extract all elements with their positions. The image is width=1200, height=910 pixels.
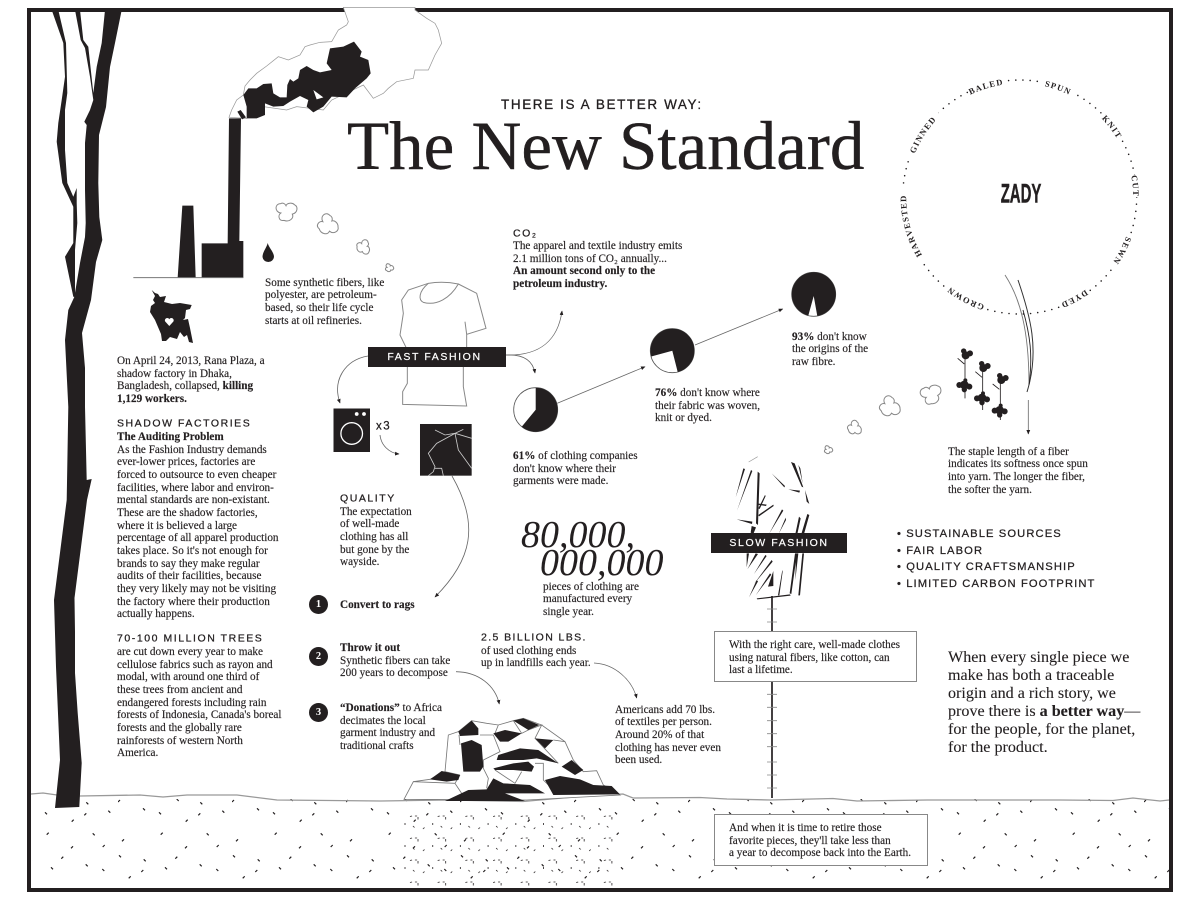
text: auditing problem: ever-lower prices, factories are	[117, 456, 255, 468]
text: Rana Plaza	[117, 355, 265, 405]
icon: oil drop	[262, 243, 274, 262]
title eyebrow: THERE IS A BETTER WAY:	[501, 97, 703, 112]
text: Rana Plaza: shadow factory in Dhaka,	[117, 368, 232, 380]
text: quality: wayside.	[340, 556, 379, 568]
text: auditing problem: These are the shadow factories,	[117, 507, 258, 519]
fibre process ring	[903, 80, 1137, 314]
label: fast fashion	[368, 347, 506, 367]
heading: shadow factories: SHADOW FACTORIES	[117, 418, 251, 430]
arrow: fast fashion to washing	[338, 356, 368, 403]
text: decompose: a year to decompose back into the Earth.	[729, 847, 911, 859]
text: auditing problem: forced to outsource to even cheaper	[117, 469, 276, 481]
text: lifetime: using natural fibers, like cotton, can	[729, 652, 890, 664]
text: quality: clothing has all	[340, 531, 408, 543]
pole	[767, 596, 777, 798]
text: pieces of clothing: single year.	[543, 606, 594, 618]
panel: landfill	[481, 632, 591, 669]
text: synthetic fibers: starts at oil refineries.	[265, 315, 362, 327]
text: CO2	[513, 240, 682, 290]
text: CO2: petroleum industry.	[513, 278, 607, 290]
arrow: landfill text to heap	[456, 672, 499, 704]
heading: landfill: 2.5 BILLION LBS.	[481, 632, 587, 644]
text: landfill: up in landfills each year.	[481, 657, 591, 669]
text: lifetime: With the right care, well-made clothes	[729, 639, 900, 651]
panel: CO2	[513, 228, 682, 290]
ground line	[31, 793, 1169, 802]
pie: 93%	[792, 272, 836, 316]
ZADY logo: ZADY	[1001, 178, 1041, 208]
text: step 2: 200 years to decompose	[340, 667, 448, 679]
closing statement: origin and a rich story, we	[948, 685, 1116, 702]
text: lifetime: last a lifetime.	[729, 664, 793, 676]
list: new standard criteria: • QUALITY CRAFTSMANSHIP	[897, 561, 1076, 573]
slow fashion dress	[736, 457, 809, 599]
big number: 000,000	[540, 542, 664, 584]
text: 93%: 93% don't know	[792, 330, 867, 342]
ring labels: DYED	[1062, 290, 1088, 307]
text: lifetime	[728, 639, 900, 676]
text: Americans: Americans add 70 lbs.	[615, 704, 715, 716]
number 3	[309, 703, 328, 722]
text: million trees: cellulose fabrics such as rayon and	[117, 659, 273, 671]
text: auditing problem: the factory where their production	[117, 596, 270, 608]
text: 76%: 76% don't know where	[655, 387, 760, 399]
text: million trees: America.	[117, 747, 158, 759]
panel: quality	[340, 492, 412, 568]
text: step 2: Throw it out	[340, 642, 400, 654]
text: staple length: into yarn. The longer the fiber,	[948, 471, 1085, 483]
closing statement: for the people, for the planet,	[948, 721, 1135, 738]
text: auditing problem: actually happens.	[117, 608, 195, 620]
closing statement: for the product.	[948, 739, 1048, 756]
text: 61%: 61% of clothing companies	[513, 450, 638, 462]
ring labels: GROWN	[947, 288, 984, 310]
text: auditing problem: The Auditing Problem	[117, 431, 224, 443]
text: synthetic fibers: polyester, are petroleum-	[265, 289, 377, 301]
fibre strands	[1005, 275, 1033, 392]
text: 93%: the origins of the	[792, 343, 868, 355]
text: CO2: An amount second only to the	[513, 265, 655, 277]
text: auditing problem: where it is believed a large	[117, 520, 237, 532]
text: staple length: the softer the yarn.	[948, 484, 1032, 496]
number 2: 2	[316, 651, 321, 662]
heading: million trees: 70-100 MILLION TREES	[117, 632, 263, 644]
number 1	[309, 595, 328, 614]
text: auditing problem: percentage of all apparel production	[117, 532, 279, 544]
text: million trees: forests and the globally rare	[117, 722, 242, 734]
text: step 2	[340, 642, 450, 679]
text: million trees: endangered forests including rain	[117, 697, 266, 709]
heading: quality: QUALITY	[340, 492, 396, 504]
text: CO2: 2.1 million tons of CO₂ annually...	[513, 253, 667, 265]
number 1: 1	[316, 599, 321, 610]
ring labels: HARVESTED	[900, 196, 922, 258]
text: Americans: been used.	[615, 754, 662, 766]
text: 93%	[792, 330, 868, 368]
arrow: 61% to 76%	[557, 367, 645, 403]
text: auditing problem	[116, 431, 279, 620]
ring labels: CUT	[1132, 176, 1139, 196]
text: pieces of clothing: manufactured every	[543, 593, 632, 605]
text: landfill: of used clothing ends	[481, 644, 576, 656]
ring labels: SPUN	[1045, 81, 1071, 94]
text: auditing problem: facilities, where labor and environ-	[117, 482, 274, 494]
text: 76%: their fabric was woven,	[655, 400, 760, 412]
text: 93%: raw fibre.	[792, 356, 835, 368]
arrow: 76% to 93%	[695, 309, 783, 345]
pie: 76%	[650, 329, 694, 373]
arrow: fibre to staple text	[1027, 400, 1029, 434]
text: pieces of clothing: pieces of clothing are	[543, 580, 639, 592]
icon: worn fabric	[420, 424, 472, 476]
ring labels: GINNED	[910, 118, 935, 153]
text: step 3: decimates the local	[340, 715, 426, 727]
arrow: fast fashion to CO2	[506, 311, 562, 355]
text: step 1: Convert to rags	[340, 599, 415, 611]
big number: 80,000,	[521, 514, 635, 556]
text: pieces of clothing	[543, 580, 639, 618]
icon: Bangladesh map	[150, 290, 193, 343]
text: Rana Plaza: On April 24, 2013, Rana Plaza, a	[117, 355, 265, 367]
panel: shadow factories	[116, 418, 279, 620]
text: million trees: are cut down every year to make	[117, 646, 263, 658]
closing statement: prove there is a better way—	[948, 703, 1140, 720]
text: million trees: rainforests of western North	[117, 735, 243, 747]
icon: washing machine	[334, 408, 370, 452]
text: quality: The expectation	[340, 506, 412, 518]
icon: cotton plants	[956, 348, 1009, 420]
number 3: 3	[316, 707, 321, 718]
text: staple length	[948, 446, 1088, 496]
text: synthetic fibers	[264, 276, 384, 327]
text: staple length: The staple length of a fiber	[948, 446, 1069, 458]
text: Americans: of textiles per person.	[615, 716, 712, 728]
text: quality: but gone by the	[340, 544, 409, 556]
list: new standard criteria	[897, 528, 1095, 590]
ring labels: BALED	[968, 80, 1002, 95]
text: landfill	[481, 644, 591, 669]
tree	[52, 10, 122, 808]
text: million trees: these trees from ancient and	[117, 684, 242, 696]
callout: lifetime	[714, 631, 917, 682]
big number	[521, 514, 664, 584]
text: 61%	[513, 450, 638, 487]
soil speckles	[32, 799, 1169, 888]
t-shirt outline	[400, 282, 486, 406]
text: auditing problem: As the Fashion Industry demands	[117, 444, 267, 456]
pie: 61%	[514, 388, 558, 432]
text: synthetic fibers: based, so their life cycle	[265, 302, 373, 314]
label: slow fashion	[711, 533, 847, 553]
number 2	[309, 647, 328, 666]
label: slow fashion: SLOW FASHION	[729, 537, 829, 549]
text: decompose: And when it is time to retire those	[729, 822, 882, 834]
clothing heap	[404, 718, 620, 801]
list: new standard criteria: • SUSTAINABLE SOURCES	[897, 528, 1062, 540]
icon: small clouds, right	[823, 384, 944, 455]
list: new standard criteria: • FAIR LABOR	[897, 544, 983, 556]
title: The New Standard	[347, 108, 864, 184]
text: Americans	[614, 704, 721, 766]
step 2	[309, 642, 450, 679]
arrow: fabric to rags	[435, 476, 469, 597]
text: step 3: traditional crafts	[340, 740, 414, 752]
text: million trees: forests of Indonesia, Canada's boreal	[117, 709, 282, 721]
closing statement: make has both a traceable	[948, 667, 1114, 684]
text: million trees: modal, with around one third of	[117, 671, 259, 683]
closing statement: When every single piece we	[948, 649, 1129, 666]
text: Americans: Around 20% of that	[615, 729, 704, 741]
step 3	[309, 702, 442, 752]
text: Americans: clothing has never even	[615, 742, 721, 754]
step 1	[309, 595, 415, 614]
text: 76%: knit or dyed.	[655, 412, 712, 424]
text: 61%: garments were made.	[513, 475, 608, 487]
closing statement	[948, 649, 1140, 756]
arrow: wash to worn fabric	[380, 435, 399, 454]
icon: small clouds, left	[276, 203, 395, 273]
ring labels: SEWN	[1114, 236, 1131, 264]
text: quality	[340, 506, 412, 568]
label: fast fashion: FAST FASHION	[387, 351, 482, 363]
text: million trees	[117, 646, 282, 759]
text: step 3	[340, 702, 442, 752]
text: 76%	[655, 387, 760, 424]
list: new standard criteria: • LIMITED CARBON FOOTPRINT	[897, 578, 1095, 590]
ring labels: KNIT	[1102, 114, 1122, 138]
text: auditing problem: brands to say they make regular	[117, 558, 260, 570]
text: step 2: Synthetic fibers can take	[340, 655, 450, 667]
heading: CO2: CO₂	[513, 228, 537, 240]
text: CO2: The apparel and textile industry emits	[513, 240, 682, 252]
factory with smoke	[133, 7, 442, 278]
arrow: landfill to Americans text	[594, 663, 637, 698]
text: staple length: indicates its softness once spun	[948, 458, 1088, 470]
arrow: fast fashion to pie	[506, 355, 535, 373]
text: decompose: favorite pieces, they'll take less than	[729, 835, 891, 847]
text: Rana Plaza: 1,129 workers.	[117, 393, 187, 405]
panel: million trees	[117, 632, 282, 759]
callout: decompose	[714, 814, 928, 866]
text: auditing problem: takes place. So it's not enough for	[117, 545, 268, 557]
text: step 3: garment industry and	[340, 727, 435, 739]
text: quality: of well-made	[340, 518, 399, 530]
text: decompose	[729, 822, 911, 859]
text: synthetic fibers: Some synthetic fibers, like	[265, 276, 384, 288]
text: 61%: don't know where their	[513, 463, 616, 475]
text: auditing problem: audits of their facilities, because	[117, 570, 261, 582]
text: Rana Plaza: Bangladesh, collapsed, killing	[117, 380, 253, 392]
text: step 3: “Donations” to Africa	[340, 702, 442, 714]
text: auditing problem: mental standards are non-existant.	[117, 494, 270, 506]
text: times three: x3	[376, 420, 391, 432]
text: auditing problem: they very likely may not be visiting	[117, 583, 276, 595]
